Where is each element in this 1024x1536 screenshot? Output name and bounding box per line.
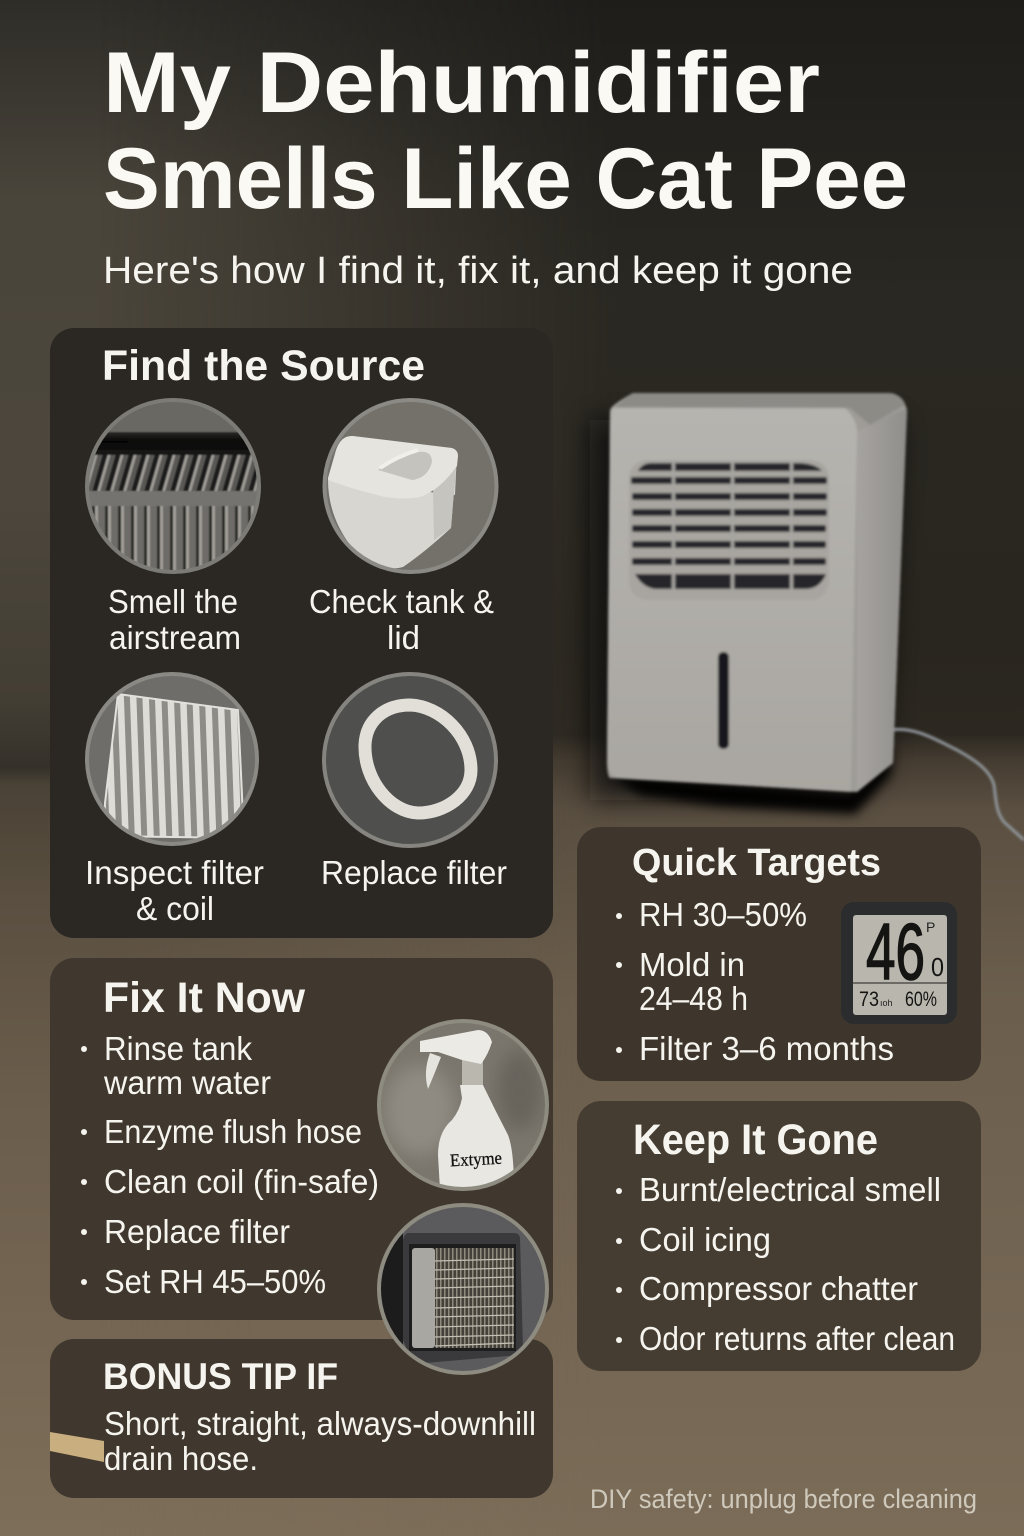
- list: targets: [616, 896, 894, 1067]
- vent grille: [629, 460, 829, 600]
- heading: Keep It Gone: Keep It Gone: [633, 1116, 878, 1164]
- panel: Quick Targets: [577, 827, 981, 1081]
- label: Inspect filter & coil: [85, 854, 264, 927]
- list: warning signs: [616, 1171, 955, 1357]
- water level slot: [718, 652, 729, 749]
- title: Smells Like Cat Pee: [103, 131, 908, 227]
- icon: replacement ring seal: [321, 673, 499, 849]
- heading: BONUS TIP IF: BONUS TIP IF: [103, 1356, 338, 1397]
- illustration: dehumidifier: [590, 393, 1024, 840]
- icon: hygrometer: 46: [866, 907, 925, 996]
- list: warning signs: Compressor chatter: [639, 1270, 918, 1307]
- label: Replace filter: Replace filter: [321, 854, 507, 891]
- label: Smell the airstream: airstream: [109, 619, 241, 656]
- list: fix steps: Clean coil (fin-safe): [104, 1163, 379, 1200]
- list: targets: Mold in: [639, 946, 745, 983]
- list: fix steps: Replace filter: [104, 1213, 290, 1250]
- icon: hygrometer: P: [926, 919, 935, 935]
- bottle label text: Extyme: [449, 1148, 502, 1170]
- list: warning signs: Burnt/electrical smell: [639, 1171, 941, 1208]
- list: fix steps: warm water: [103, 1064, 271, 1101]
- icon: coil close-up: [85, 398, 261, 574]
- panel: Bonus Tip: [50, 1339, 553, 1498]
- heading: Find the Source: Find the Source: [102, 342, 425, 390]
- title: My Dehumidifier: [103, 35, 820, 131]
- label: Smell the airstream: [108, 583, 241, 656]
- list: warning signs: Coil icing: [639, 1221, 771, 1258]
- label: Check tank & lid: [309, 583, 494, 656]
- label: Smell the airstream: Smell the: [108, 583, 238, 620]
- icon: hygrometer: 73: [859, 988, 879, 1011]
- text: bonus tip: Short, straight, always-downhill: [104, 1405, 536, 1442]
- list: warning signs: Odor returns after clean: [639, 1320, 955, 1357]
- label: Check tank & lid: lid: [387, 619, 420, 656]
- footer: safety note: DIY safety: unplug before cleaning: [590, 1484, 977, 1514]
- list: targets: 24–48 h: [639, 980, 748, 1017]
- icon: water tank and lid: [323, 399, 499, 575]
- list: fix steps: [81, 1030, 379, 1300]
- label: Inspect filter & coil: & coil: [136, 890, 214, 927]
- list: targets: Filter 3–6 months: [639, 1030, 894, 1067]
- icon: clean air grille: [375, 1205, 547, 1375]
- panel: Find the Source: [50, 328, 553, 938]
- subtitle: Here's how I find it, fix it, and keep it gone: [103, 250, 853, 292]
- power cord: [892, 729, 1024, 840]
- list: fix steps: Enzyme flush hose: [104, 1113, 362, 1150]
- list: fix steps: Rinse tank: [104, 1030, 252, 1067]
- list: targets: RH 30–50%: [639, 896, 807, 933]
- panel: Fix It Now: [50, 958, 553, 1320]
- icon: hygrometer: ıoh: [880, 998, 893, 1008]
- icon: hygrometer: 0: [931, 952, 944, 982]
- label: Check tank & lid: Check tank &: [309, 583, 494, 620]
- text: bonus tip: drain hose.: [104, 1440, 258, 1477]
- title: [103, 35, 908, 227]
- icon: filter: [86, 673, 260, 845]
- list: fix steps: Set RH 45–50%: [104, 1263, 326, 1300]
- icon: hygrometer: 60%: [905, 988, 937, 1011]
- label: Inspect filter & coil: Inspect filter: [85, 854, 264, 891]
- text: bonus tip: [104, 1405, 536, 1477]
- icon: enzyme spray bottle: [379, 1021, 547, 1190]
- icon: hygrometer: [841, 902, 957, 1024]
- heading: Fix It Now: Fix It Now: [103, 974, 306, 1022]
- heading: Quick Targets: Quick Targets: [632, 842, 881, 884]
- tan drain hose strip: [50, 1432, 104, 1462]
- panel: Keep It Gone: [577, 1101, 981, 1371]
